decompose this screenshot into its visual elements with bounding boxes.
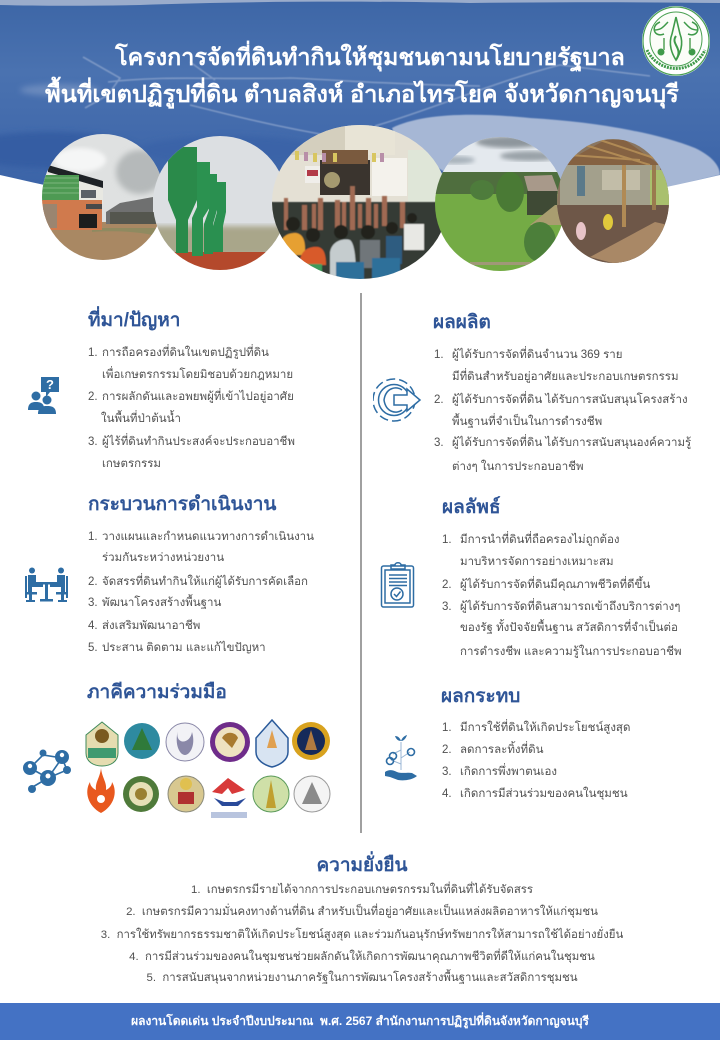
list: process items: 1. bbox=[88, 531, 98, 543]
list: sustainability items: 3. การใช้ทรัพยากรธรรมชาติให้เกิดประโยชน์สูงสุด และร่วมกันอนุรักษ์ทรัพยากรให้สามารถใช้ได้อย่างยั่งยืน bbox=[101, 929, 623, 941]
list: outputs items: 3. bbox=[434, 437, 444, 449]
list: outputs items bbox=[434, 346, 691, 473]
list: outputs items: ผู้ได้รับการจัดที่ดิน ได้รับการสนับสนุนโครงสร้าง bbox=[452, 394, 688, 406]
photo: water towers bbox=[154, 136, 280, 270]
list: sustainability items: 1. เกษตรกรมีรายได้จากการประกอบเกษตรกรรมในที่ดินที่ได้รับจัดสรร bbox=[191, 884, 533, 896]
list: sustainability items: 4. การมีส่วนร่วมของคนในชุมชนช่วยผลักดันให้เกิดการพัฒนาคุณภาพชีวิตที่ดีให้แก่คนในชุมชน bbox=[129, 951, 595, 963]
list: impact items: เกิดการมีส่วนร่วมของคนในชุมชน bbox=[460, 788, 628, 800]
title: โครงการจัดที่ดินทำกินให้ชุมชนตามนโยบายรัฐบาล bbox=[115, 44, 625, 70]
icon: clipboard bbox=[380, 562, 414, 608]
list: process items: ร่วมกันระหว่างหน่วยงาน bbox=[102, 552, 224, 564]
panel: sustainability bbox=[101, 851, 623, 984]
list: outcomes items bbox=[442, 531, 682, 658]
footer bar: ผลงานโดดเด่น ประจำปีงบประมาณ พ.ศ. 2567 สำนักงานการปฏิรูปที่ดินจังหวัดกาญจนบุรี bbox=[131, 1014, 589, 1028]
panel: background problem bbox=[28, 306, 295, 470]
list: outcomes items: ของรัฐ ทั้งปัจจัยพื้นฐาน สวัสดิการที่จำเป็นต่อ bbox=[460, 622, 678, 634]
list: outcomes items: มีการนำที่ดินที่ถือครองไม่ถูกต้อง bbox=[460, 534, 620, 546]
photo: farmland bbox=[435, 137, 562, 271]
icon: meeting at table bbox=[25, 568, 68, 602]
list: outputs items: มีที่ดินสำหรับอยู่อาศัยและประกอบเกษตรกรรม bbox=[452, 371, 679, 383]
icon: people with question: ? bbox=[46, 377, 54, 392]
list: background items: 1. bbox=[88, 347, 98, 359]
list: background items: ในพื้นที่ป่าต้นน้ำ bbox=[101, 413, 181, 425]
list: impact items: ลดการละทิ้งที่ดิน bbox=[460, 744, 543, 756]
list: process items: จัดสรรที่ดินทำกินให้แก่ผู้ได้รับการคัดเลือก bbox=[102, 576, 308, 588]
photo: community building bbox=[42, 134, 160, 260]
panel: partners bbox=[23, 682, 330, 818]
title bbox=[45, 40, 679, 109]
list: outcomes items: 1. bbox=[442, 534, 452, 546]
heading: process: กระบวนการดำเนินงาน bbox=[88, 494, 276, 515]
list: outputs items: ต่างๆ ในการประกอบอาชีพ bbox=[452, 461, 584, 473]
white curved base bbox=[0, 175, 720, 300]
list: impact items: 4. bbox=[442, 788, 452, 800]
logo row 2 bbox=[87, 768, 330, 818]
list: outcomes items: มาบริหารจัดการอย่างเหมาะสม bbox=[460, 556, 614, 568]
list: outputs items: พื้นฐานที่จำเป็นในการดำรงชีพ bbox=[452, 416, 602, 428]
header banner with aerial photo and circular photos bbox=[0, 0, 720, 279]
list: background items: เพื่อเกษตรกรรมโดยมิชอบด้วยกฎหมาย bbox=[102, 369, 293, 381]
list: impact items: 1. bbox=[442, 722, 452, 734]
list: background items: การถือครองที่ดินในเขตปฏิรูปที่ดิน bbox=[102, 347, 269, 359]
list: process items: พัฒนาโครงสร้างพื้นฐาน bbox=[102, 597, 221, 609]
list: outcomes items: ผู้ได้รับการจัดที่ดินมีคุณภาพชีวิตที่ดีขึ้น bbox=[460, 579, 650, 591]
icon: gear with arrow bbox=[373, 378, 422, 422]
list: outcomes items: 2. bbox=[442, 579, 452, 591]
list: sustainability items bbox=[101, 881, 623, 984]
list: background items: การผลักดันและอพยพผู้ที่เข้าไปอยู่อาศัย bbox=[102, 391, 294, 403]
list: background items: 2. bbox=[88, 391, 98, 403]
list: background items bbox=[88, 344, 295, 470]
logo bbox=[642, 6, 710, 76]
list: process items: 3. bbox=[88, 597, 98, 609]
list: outputs items: 2. bbox=[434, 394, 444, 406]
heading: outcomes: ผลลัพธ์ bbox=[442, 497, 501, 518]
panel: outcomes bbox=[380, 496, 682, 658]
list: outcomes items: 3. bbox=[442, 601, 452, 613]
list: process items: ส่งเสริมพัฒนาอาชีพ bbox=[102, 620, 200, 632]
heading: outputs: ผลผลิต bbox=[433, 312, 491, 333]
list: outputs items: ผู้ได้รับการจัดที่ดิน ได้รับการสนับสนุนองค์ความรู้ bbox=[452, 437, 691, 449]
center divider bbox=[360, 293, 362, 833]
title: พื้นที่เขตปฏิรูปที่ดิน ตำบลสิงห์ อำเภอไทรโยค จังหวัดกาญจนบุรี bbox=[45, 82, 679, 108]
aerial background bbox=[0, 0, 720, 240]
list: outcomes items: การดำรงชีพ และความรู้ในการประกอบอาชีพ bbox=[460, 646, 682, 658]
heading: sustainability: ความยั่งยืน bbox=[316, 855, 408, 876]
icon: hand with plant bbox=[385, 735, 417, 780]
list: outputs items: 1. bbox=[434, 349, 444, 361]
list: impact items: เกิดการพึ่งพาตนเอง bbox=[460, 766, 557, 778]
list: process items: วางแผนและกำหนดแนวทางการดำเนินงาน bbox=[102, 531, 314, 543]
list: outputs items: ผู้ได้รับการจัดที่ดินจำนวน 369 ราย bbox=[452, 349, 623, 361]
icon: people with question bbox=[28, 377, 59, 414]
photo: community meeting bbox=[272, 125, 442, 279]
list: background items: 3. bbox=[88, 436, 98, 448]
lake bbox=[392, 115, 720, 190]
icon: network bbox=[23, 750, 71, 793]
list: process items: 4. bbox=[88, 620, 98, 632]
panel: process bbox=[25, 494, 314, 654]
heading: background: ที่มา/ปัญหา bbox=[88, 310, 180, 331]
list: process items: 5. bbox=[88, 642, 98, 654]
panel: impact bbox=[385, 686, 630, 800]
heading: impact: ผลกระทบ bbox=[441, 686, 520, 707]
list: sustainability items: 2. เกษตรกรมีความมั่นคงทางด้านที่ดิน สำหรับเป็นที่อยู่อาศัยและเป็นแหล่งผลิตอาหารให้แก่ชุมชน bbox=[126, 906, 598, 918]
list: impact items: 2. bbox=[442, 744, 452, 756]
list: background items: ผู้ไร้ที่ดินทำกินประสงค์จะประกอบอาชีพ bbox=[102, 436, 295, 448]
list: sustainability items: 5. การสนับสนุนจากหน่วยงานภาครัฐในการพัฒนาโครงสร้างพื้นฐานและสวัสดิการชุมชน bbox=[146, 972, 578, 984]
list: impact items: 3. bbox=[442, 766, 452, 778]
panel: outputs bbox=[373, 312, 691, 473]
logo row 1 bbox=[86, 720, 330, 767]
list: process items: 2. bbox=[88, 576, 98, 588]
list: process items: ประสาน ติดตาม และแก้ไขปัญหา bbox=[102, 642, 266, 654]
footer bar bbox=[0, 1003, 720, 1040]
list: impact items bbox=[442, 719, 630, 800]
list: background items: เกษตรกรรม bbox=[102, 458, 161, 470]
photo: chicken coop bbox=[557, 139, 669, 263]
partner logos bbox=[86, 719, 330, 818]
list: impact items: มีการใช้ที่ดินให้เกิดประโยชน์สูงสุด bbox=[460, 722, 630, 734]
list: outcomes items: ผู้ได้รับการจัดที่ดินสามารถเข้าถึงบริการต่างๆ bbox=[460, 601, 680, 613]
list: process items bbox=[88, 530, 314, 654]
heading: partners: ภาคีความร่วมมือ bbox=[87, 682, 227, 703]
